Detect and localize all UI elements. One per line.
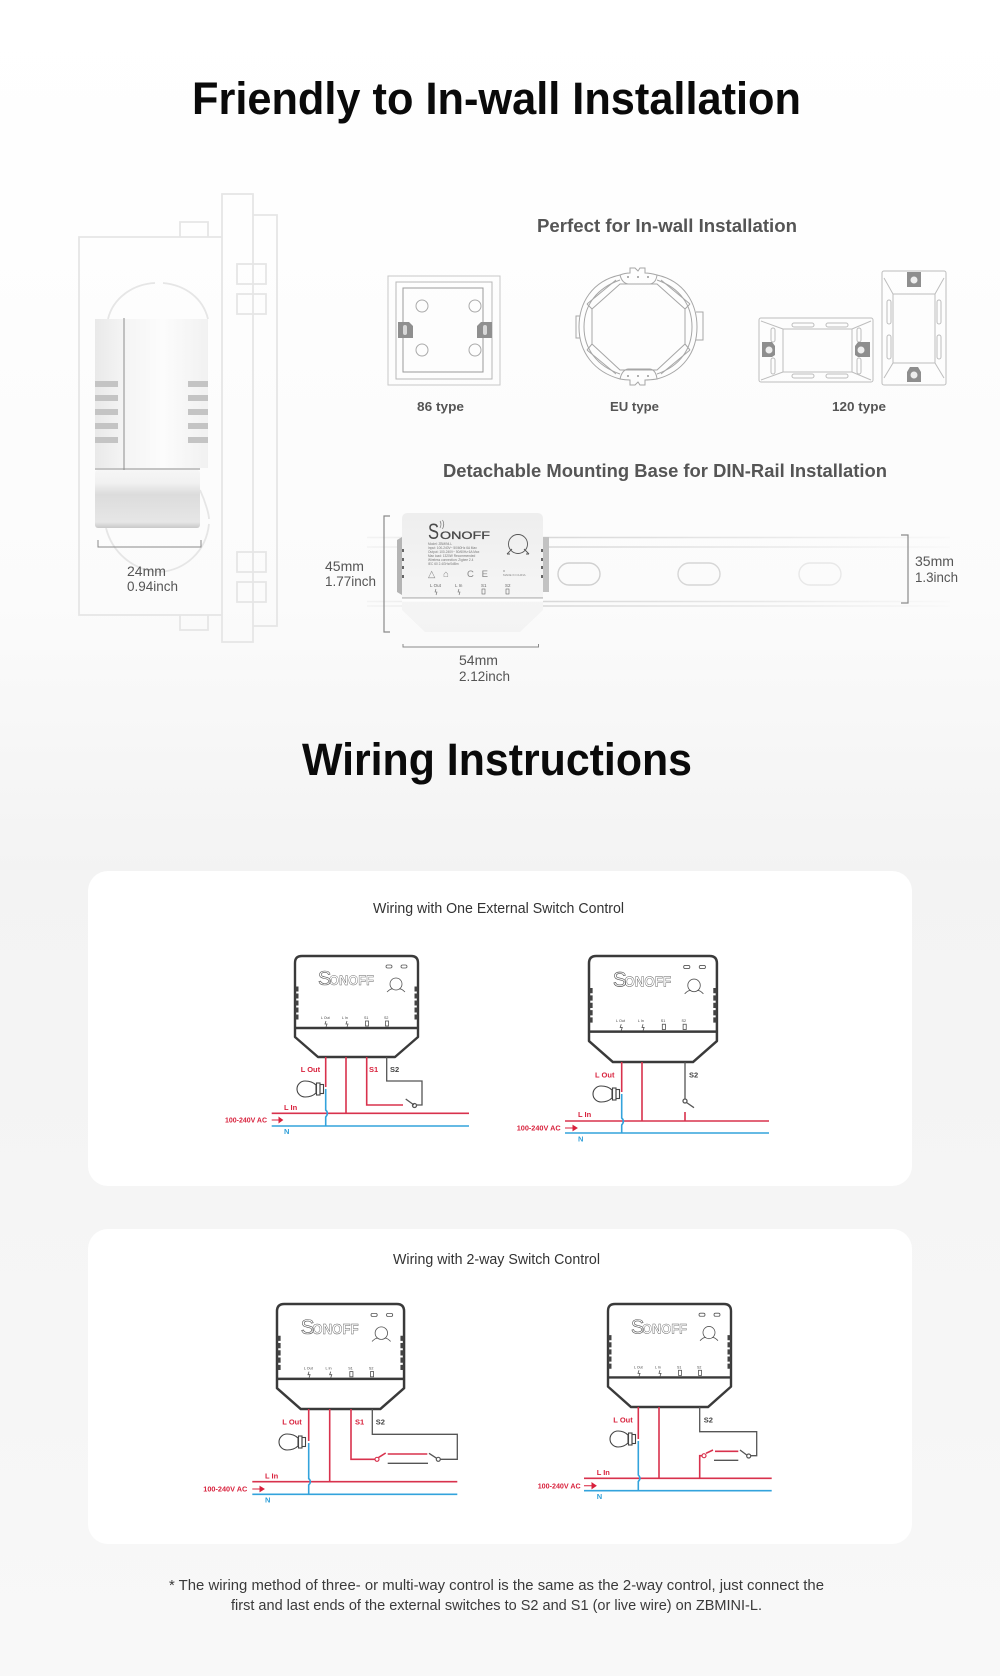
dimension 45mm: 1.77inch [325, 573, 376, 589]
diagram: 2-way, S2 only [538, 1304, 772, 1501]
switch contacts [702, 1454, 751, 1458]
bulb [610, 1431, 636, 1447]
compliance marks: △⌂ CE [428, 569, 488, 580]
labels: L Out [613, 1415, 633, 1424]
product specification text: IEC 60 2.4GHz/0dBm [428, 562, 459, 566]
panel: wiring with one external switch [88, 871, 912, 1186]
terminal labels [430, 583, 511, 595]
label: 86 type [417, 399, 464, 414]
terminal labels: L Out [430, 583, 442, 588]
labels: S2 [689, 1071, 698, 1080]
dimension 45mm [325, 516, 390, 632]
diagram: 2-way, S1 S2 [203, 1304, 457, 1505]
device clips [397, 537, 549, 595]
device outline: S [318, 968, 331, 990]
labels: L Out [282, 1418, 302, 1427]
dimension 45mm: 45mm [325, 558, 364, 574]
factory note [503, 569, 526, 577]
dimension 24mm: 0.94inch [127, 578, 178, 594]
terminal labels: S2 [505, 583, 511, 588]
device outline: S1 [677, 1365, 681, 1369]
labels: N [578, 1135, 583, 1144]
product specification text [428, 542, 480, 566]
card heading: Wiring with One External Switch Control [373, 900, 624, 917]
wires [272, 1057, 469, 1113]
footnote [169, 1577, 824, 1614]
product specification text: Output: 100-240V~ 50/60Hz 6A Max [428, 550, 480, 554]
dimension 24mm [98, 540, 201, 594]
label: EU type [610, 399, 659, 414]
wires [252, 1409, 457, 1482]
card background [88, 1229, 912, 1544]
labels: L In [578, 1110, 592, 1119]
labels: S1 [355, 1418, 364, 1427]
heading: Perfect for In-wall Installation: Perfect for In-wall Installation [537, 216, 797, 236]
logo: SONOFF [428, 519, 490, 544]
labels: S1 [369, 1065, 378, 1074]
terminal labels: S1 [481, 583, 487, 588]
device outline: S [631, 1316, 644, 1339]
device outline [608, 1304, 731, 1407]
device body [402, 513, 543, 632]
terminal labels: L In [455, 583, 463, 588]
panel: wiring with 2-way switch [88, 1229, 912, 1544]
labels [517, 1071, 698, 1144]
dimension 35mm [901, 535, 958, 603]
footnote: * The wiring method of three- or multi-way control is the same as the 2-way control, just connect the [169, 1577, 824, 1594]
labels: L In [284, 1103, 298, 1112]
panel: in-wall side view [79, 194, 277, 642]
box drawing [388, 276, 500, 385]
device outline: L In [326, 1367, 332, 1371]
device outline: L In [655, 1365, 661, 1369]
device outline: S1 [364, 1016, 368, 1020]
vertical box [882, 271, 946, 385]
product specification text: Model: ZBMINI-L [428, 542, 452, 546]
wires [584, 1407, 772, 1478]
mounting holes arc [106, 283, 209, 572]
device outline: L Out [634, 1365, 643, 1369]
device outline: L Out [321, 1016, 330, 1020]
card background [88, 871, 912, 1186]
device outline: S1 [348, 1367, 353, 1371]
dimension 54mm [403, 644, 538, 684]
bulb [593, 1086, 620, 1102]
product specification text: Max load: 1320W Recommended [428, 554, 476, 558]
device outline: S [613, 968, 627, 991]
device side photo [95, 318, 208, 528]
diagram: one switch, S1 S2 [225, 956, 469, 1136]
heading: Detachable Mounting Base for DIN-Rail Installation: Detachable Mounting Base for DIN-Rail Installation [443, 461, 887, 481]
device outline [589, 956, 717, 1062]
footnote: first and last ends of the external switches to S2 and S1 (or live wire) on ZBMINI-L. [231, 1597, 762, 1614]
device outline: S [301, 1316, 315, 1339]
panel: EU type box [576, 268, 703, 414]
dimension 24mm: 24mm [127, 563, 166, 579]
factory note: R [503, 569, 506, 573]
label: 120 type [832, 399, 886, 414]
rail [367, 538, 950, 606]
logo: SONOFF: ONOFF [440, 530, 490, 542]
diagram: one switch, S2 only [517, 956, 769, 1144]
labels: N [597, 1492, 602, 1501]
switch contacts [375, 1457, 440, 1461]
device outline: S2 [697, 1365, 701, 1369]
labels: 100-240V AC [225, 1116, 268, 1124]
wall box outline [79, 222, 222, 630]
pairing button [507, 534, 529, 554]
device outline: ONOFF [624, 974, 671, 990]
labels [203, 1418, 385, 1505]
side latch dots [402, 549, 543, 578]
bulb [297, 1081, 324, 1097]
device outline: ONOFF [642, 1320, 687, 1337]
labels: L In [597, 1468, 610, 1477]
ring drawing [576, 268, 703, 385]
labels: 100-240V AC [203, 1485, 248, 1494]
labels: L In [265, 1471, 279, 1480]
device outline: L In [342, 1016, 348, 1020]
labels: 100-240V AC [517, 1124, 561, 1133]
device outline [277, 1304, 404, 1409]
labels: S2 [376, 1418, 385, 1427]
dimension 54mm: 2.12inch [459, 668, 510, 684]
labels [225, 1065, 399, 1136]
product specification text: Wireless connection: Zigbee 2.4 [428, 558, 474, 562]
labels [538, 1415, 713, 1501]
device outline: S2 [384, 1016, 388, 1020]
labels: S2 [704, 1415, 713, 1424]
device outline: ONOFF [312, 1322, 359, 1338]
dimension 35mm: 35mm [915, 553, 954, 569]
title: Friendly to In-wall Installation: Friendly to In-wall Installation [192, 73, 801, 124]
dimension 35mm: 1.3inch [915, 569, 958, 585]
labels: L Out [301, 1065, 321, 1074]
labels: S2 [390, 1065, 399, 1074]
panel: 86 type box [388, 276, 500, 414]
plate clips [237, 264, 266, 602]
device outline: S2 [682, 1019, 686, 1023]
device outline [295, 956, 418, 1057]
device outline: ONOFF [329, 972, 374, 988]
bulb [279, 1434, 306, 1450]
device outline: S2 [369, 1367, 373, 1371]
switch plate [222, 194, 277, 642]
wires [565, 1062, 769, 1121]
device outline: S1 [661, 1019, 665, 1023]
panel: 120 type box [759, 271, 946, 414]
labels: N [284, 1127, 289, 1136]
panel: DIN-rail device [325, 513, 958, 684]
card heading: Wiring with 2-way Switch Control [393, 1251, 600, 1268]
device outline: L In [638, 1019, 644, 1023]
labels: 100-240V AC [538, 1481, 581, 1490]
factory note: MADE IN CHINA [503, 573, 526, 577]
device outline: L Out [304, 1367, 313, 1371]
horizontal box [759, 318, 873, 382]
logo: SONOFF: S [428, 519, 439, 544]
product specification text: Input: 100-240V~ 50/60Hz 6A Max [428, 546, 477, 550]
title: Wiring Instructions: Wiring Instructions [302, 734, 692, 785]
labels: L Out [595, 1071, 615, 1080]
labels: N [265, 1496, 270, 1505]
dimension 54mm: 54mm [459, 652, 498, 668]
device outline: L Out [616, 1019, 626, 1023]
